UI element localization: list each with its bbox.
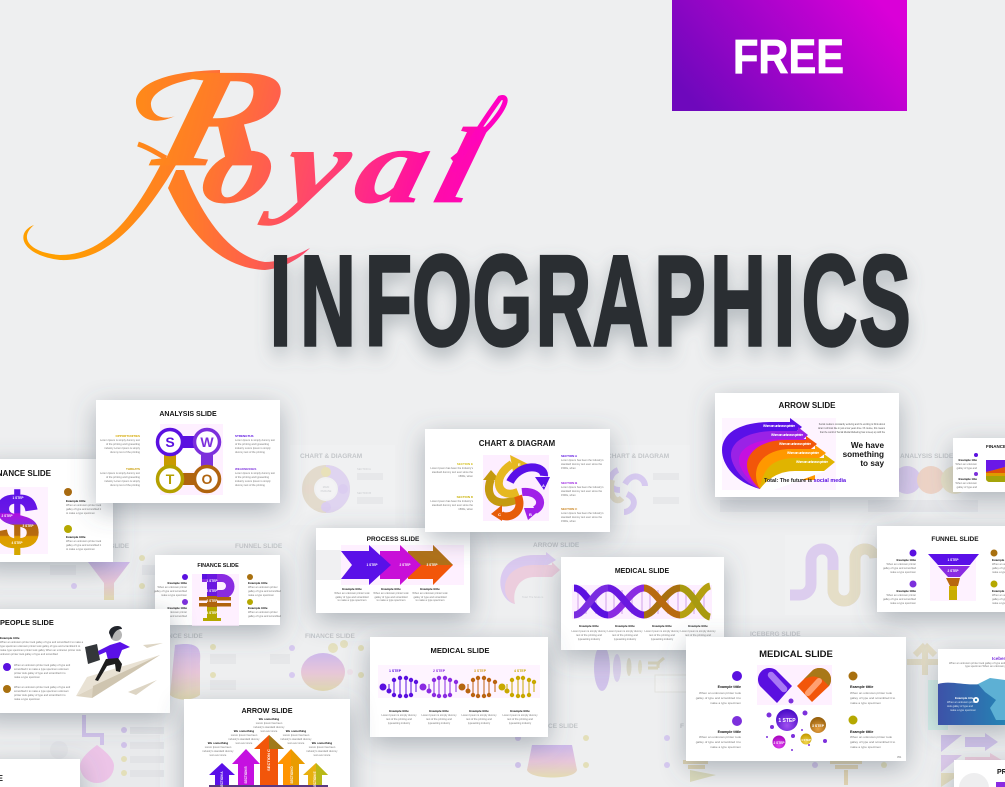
panel: people slide: Example tittle	[0, 636, 20, 640]
panel: finance slide ruble: galley of type and scrambled	[154, 614, 188, 618]
heading: MEDICAL SLIDE	[431, 646, 489, 655]
ghost slides: faded background slides: ANALYSIS SLIDE	[900, 453, 954, 460]
panel: people slide: When an unknown printer took galley of type and	[14, 685, 71, 689]
ghost slides: faded background slides: ICEBERG SLIDE	[750, 631, 801, 638]
panel: medical slide dna: text of the printing and	[612, 633, 638, 637]
house arrows chart: SECTION D	[290, 766, 294, 784]
icon: ruble sign: 3 STEP	[207, 599, 218, 603]
ghost slides: faded background slides: F	[680, 723, 684, 730]
panel: medical slide dots: Example tittle	[510, 709, 530, 713]
panel: people slide: scrambled it to make a type specimen unknown	[14, 667, 69, 671]
panel: medical slide dna: Lorem Ipsum is simply dummy	[644, 629, 680, 633]
panel: analysis slide: Lorem Ipsum is simply dummy text	[100, 438, 140, 442]
panel: medical slide dna: text of the printing and	[649, 633, 675, 637]
iceberg and sea	[938, 682, 1005, 725]
icon: dollar sign: 4 STEP	[12, 541, 23, 545]
panel: medical slide dna: Example tittle	[579, 624, 599, 628]
arrows: 3 STEP	[427, 563, 438, 567]
panel: medical slide dots: Lorem Ipsum is simply dummy	[502, 713, 538, 717]
panel: medical slide pills: Example tittle	[718, 730, 741, 734]
panel: arrow slide bottom: We something	[208, 741, 228, 745]
panel: finance slide dollar: galley of type and scrambled it	[66, 507, 101, 511]
panel: medical slide pills: When an unknown printer took	[699, 735, 741, 739]
bubbles: 2 STEP	[774, 741, 785, 745]
panel: finance slide far right: When an unknown	[956, 462, 978, 466]
panel: process slide: to make a type specimen	[377, 598, 406, 602]
panel: chart and diagram slide: SECTION A	[561, 454, 578, 458]
panel: medical slide dots: 2 STEP	[433, 669, 446, 673]
heading: PROCESS SLIDE	[367, 536, 420, 543]
panel: slide bottom left	[0, 759, 80, 787]
panel: finance slide ruble	[154, 555, 282, 626]
panel: funnel slide	[877, 526, 1005, 612]
panel: finance slide ruble: When an unknown printer	[157, 610, 187, 614]
panel: analysis slide: WEAKNESSES	[235, 467, 256, 471]
text block: Social media is constantly evolving and it's exciting to think about	[819, 423, 885, 426]
banner: FREE: FREE	[733, 31, 844, 84]
panel: process slide bottom right	[954, 760, 1005, 787]
ghost slides: faded background slides: SECTION A	[357, 467, 371, 471]
panel: analysis slide: THREATS	[126, 467, 140, 471]
panel: medical slide dna: Lorem Ipsum is simply dummy	[680, 629, 716, 633]
panel: arrow slide bottom: Lorem Ipsum has been	[283, 733, 310, 737]
panel: arrow slide top	[715, 393, 899, 497]
panel: medical slide dots: Example tittle	[389, 709, 409, 713]
panel: chart and diagram slide: Lorem Ipsum has been the Industry's	[430, 499, 474, 503]
panel: medical slide dots: 3 STEP	[474, 669, 487, 673]
panel: analysis slide: dummy text of the printing	[235, 483, 265, 487]
callout: we have something to say: something	[843, 450, 884, 459]
swot diagram: T	[166, 471, 175, 487]
panel: finance slide dollar: Example tittle	[66, 499, 86, 503]
panel: medical slide dna: typesetting industry	[687, 637, 710, 641]
curved arrows: When an unknown printer	[779, 442, 812, 446]
panel: medical slide dots: typesetting industry	[428, 721, 451, 725]
panel: medical slide dots: typesetting industry	[509, 721, 532, 725]
swot diagram: O	[202, 471, 213, 487]
swirl arrows: E	[518, 462, 521, 467]
title script: Royal: oyal	[191, 107, 504, 226]
panel: arrow slide bottom: text ever since	[236, 741, 253, 745]
panel: medical slide dots: text of the printing and	[507, 717, 533, 721]
text block	[818, 423, 886, 434]
swot diagram: S	[165, 434, 175, 450]
panel: arrow slide bottom: We something	[234, 729, 254, 733]
panel: chart and diagram slide: 1500s, when	[561, 519, 576, 523]
icon: ruble sign: 1 STEP	[207, 579, 218, 583]
ghost slides: faded background slides: CHART & DIAGRAM	[607, 453, 669, 460]
arrows: 1 STEP	[367, 563, 378, 567]
panel: arrow slide bottom: We something	[312, 741, 332, 745]
text block: that the world of Social Media Marketing has to keep up with the	[820, 431, 886, 434]
panel: chart and diagram slide	[425, 429, 610, 532]
icon: dollar sign: 2 STEP	[2, 514, 13, 518]
panel: finance slide ruble: Example tittle	[248, 581, 268, 585]
panel: medical slide dots: Lorem Ipsum is simply dummy	[461, 713, 497, 717]
panel: process slide: Example tittle	[420, 587, 440, 591]
arrows	[341, 545, 453, 585]
panel: medical slide dna: Example tittle	[615, 624, 635, 628]
panel: finance slide ruble: When an unknown printer	[248, 610, 278, 614]
panel: chart and diagram slide: standard dummy text ever since the	[432, 470, 474, 474]
ghost slides: faded background slides: CHART & DIAGRAM	[300, 453, 362, 460]
ghost slides: faded background slides: CE SLIDE	[548, 723, 579, 730]
panel: medical slide dots: typesetting industry	[468, 721, 491, 725]
panel: analysis slide: Lorem Ipsum is simply dummy text	[100, 471, 140, 475]
panel: funnel slide: Example tittle	[896, 558, 916, 562]
panel: analysis slide: dummy text of the printing	[110, 450, 141, 454]
panel: chart and diagram slide: standard dummy text ever since the	[432, 503, 474, 507]
arrows: 2 STEP	[400, 563, 411, 567]
panel: finance slide ruble: make a type specimen	[161, 593, 188, 597]
text block: what it will look like in just a few years time. Of course, this means	[818, 427, 886, 430]
panel: analysis slide: industry Lorem Ipsum is simply	[104, 446, 141, 450]
panel: people slide	[0, 609, 170, 713]
heading: FUNNEL SLIDE	[931, 536, 979, 543]
panel: arrow slide bottom: industry's standard dummy	[229, 737, 260, 741]
panel: medical slide pills: Example tittle	[718, 685, 741, 689]
title script: Royal	[23, 41, 521, 270]
panel: medical slide pills: 351	[897, 755, 902, 759]
icon: ruble sign: 2 STEP	[207, 589, 218, 593]
icon: wallet	[986, 460, 1005, 482]
panel: medical slide dots: text of the printing and	[466, 717, 492, 721]
heading: MEDICAL SLIDE	[615, 568, 669, 575]
panel: medical slide pills: make a type specimen	[710, 701, 741, 705]
ghost slides: faded background slides	[40, 445, 1005, 787]
ghost slides: faded background slides: NCE SLIDE	[168, 633, 203, 640]
panel: analysis slide: OPPORTUNITIES	[115, 434, 140, 438]
panel: medical slide pills: Example tittle	[850, 730, 873, 734]
house arrows chart	[209, 735, 328, 787]
panel: analysis slide: of the printing and typesetting	[235, 442, 270, 446]
panel: medical slide dots	[370, 637, 548, 737]
panel: medical slide pills: galley of type and scrambled it to	[696, 740, 741, 744]
swot diagram	[158, 430, 220, 492]
panel: medical slide dna: Example tittle	[688, 624, 708, 628]
panel: funnel slide: When an unknown printer	[886, 562, 916, 566]
bubbles: 1 STEP	[778, 718, 796, 724]
bubbles: 4 STEP	[801, 738, 811, 742]
panel: medical slide pills	[686, 637, 906, 761]
panel: process slide	[316, 528, 470, 613]
panel: medical slide dots: Lorem Ipsum is simply dummy	[381, 713, 417, 717]
panel: people slide: When an unknown printer took galley of type and	[14, 663, 71, 667]
panel: medical slide dna: Lorem Ipsum is simply dummy	[571, 629, 607, 633]
banner: FREE	[672, 0, 907, 111]
panel: medical slide dna: Example tittle	[652, 624, 672, 628]
panel: iceberg slide	[928, 649, 1005, 730]
ghost slides: faded background slides: MAIN	[323, 485, 329, 489]
panel: finance slide ruble: When an unknown printer	[157, 585, 187, 589]
panel: medical slide dots: Lorem Ipsum is simply dummy	[421, 713, 457, 717]
ghost slides: faded background slides: FINANCE SLIDE	[305, 633, 356, 640]
total line: Total: The future is social media	[764, 478, 847, 484]
dna beads chain	[380, 676, 536, 698]
panel: finance slide ruble: make a type specimen	[248, 593, 275, 597]
panel: finance slide far right: galley of type and	[957, 485, 978, 489]
panel: finance slide ruble: galley of type and scrambled	[154, 589, 188, 593]
callout: we have something to say: to say	[860, 459, 884, 468]
panel: funnel slide: When an unknown printer	[886, 593, 916, 597]
dna helix	[574, 586, 710, 617]
panel: medical slide pills: galley of type and scrambled it to	[850, 696, 896, 700]
curved arrows: When an unknown printer	[796, 460, 829, 464]
ghost slides: faded background slides: SLIDE	[110, 543, 130, 550]
panel: finance slide far right: Example title	[958, 477, 977, 481]
panel: arrow slide bottom: Lorem Ipsum has been	[309, 745, 336, 749]
illustration: businessman on paper plane	[76, 626, 163, 698]
bubbles: 3 STEP	[812, 724, 825, 728]
panel: medical slide dots: text of the printing and	[386, 717, 412, 721]
panel: finance slide far right: Example title	[958, 458, 977, 462]
panel: arrow slide bottom: text ever since	[210, 753, 227, 757]
panel: funnel slide: Example tittle	[896, 589, 916, 593]
panel: medical slide dna: text of the printing and	[685, 633, 711, 637]
panel: arrow slide bottom: text ever since	[261, 729, 278, 733]
panel: people slide: printer took galley of type and scrambled it to	[14, 693, 66, 697]
panel: medical slide dna	[561, 557, 724, 650]
panel: chart and diagram slide: standard dummy text ever since the	[561, 462, 603, 466]
panel: medical slide pills: galley of type and scrambled it to	[696, 696, 741, 700]
ghost slides: faded background slides: SECTION B	[357, 491, 371, 495]
panel: people slide: printer took galley of type and scrambled it to	[14, 671, 66, 675]
panel: medical slide dna: typesetting industry	[614, 637, 637, 641]
panel: arrow slide bottom: Lorem Ipsum has been	[231, 733, 258, 737]
panel: chart and diagram slide: Lorem Ipsum has been the Industry's	[430, 466, 474, 470]
curved arrows: When an unknown printer	[771, 433, 804, 437]
panel: finance slide ruble: Example tittle	[167, 606, 187, 610]
panel: analysis slide: of the printing and typesetting	[235, 475, 270, 479]
panel: chart and diagram slide: Lorem Ipsum has been the Industry's	[561, 458, 604, 462]
panel: arrow slide bottom: text ever since	[288, 741, 305, 745]
panel: analysis slide: Lorem Ipsum is simply dummy text	[235, 471, 275, 475]
panel: chart and diagram slide: SECTION B	[561, 481, 578, 485]
panel: finance slide dollar: to make a type specimen	[66, 511, 95, 515]
panel: people slide: make a type specimen	[14, 697, 41, 701]
panel: chart and diagram slide: standard dummy text ever since the	[561, 515, 603, 519]
panel: process slide: When an unknown printer took	[373, 591, 409, 595]
panel: finance slide dollar: When an unknown printer took	[66, 539, 102, 543]
curved arrows: When an unknown printer	[787, 451, 820, 455]
panel: medical slide dots: Example tittle	[469, 709, 489, 713]
panel: arrow slide bottom: We something	[286, 729, 306, 733]
panel: iceberg slide: took galley of type and	[947, 704, 974, 708]
funnel chart: 1 STEP	[948, 558, 959, 562]
panel: finance slide dollar: to make a type specimen	[66, 547, 95, 551]
panel: analysis slide: of the printing and typesetting	[106, 475, 141, 479]
panel: medical slide pills: galley of type and scrambled it to	[850, 740, 896, 744]
heading: FINANCE SLIDE	[197, 563, 239, 569]
panel: funnel slide: make a type specimen	[890, 601, 917, 605]
panel: finance slide far right: galley of type and	[957, 466, 978, 470]
panel: people slide: scrambled it to make a type specimen unknown	[14, 689, 69, 693]
panel: medical slide pills: make a type specimen	[850, 745, 881, 749]
panel: process slide: Example tittle	[342, 587, 362, 591]
funnel chart: 2 STEP	[948, 569, 959, 573]
heading: CHART & DIAGRAM	[479, 439, 556, 448]
panel: medical slide pills: make a type specimen	[850, 701, 881, 705]
panel: analysis slide	[96, 400, 280, 503]
swirl arrows	[483, 455, 550, 521]
panel: finance slide dollar: Example tittle	[66, 535, 86, 539]
swot diagram: W	[200, 434, 214, 450]
panel: iceberg slide: make a type specimen	[950, 708, 977, 712]
panel: medical slide pills: When an unknown printer took	[699, 691, 741, 695]
panel: process slide: When an unknown printer took	[412, 591, 448, 595]
swirl arrows: C	[498, 512, 501, 517]
panel: medical slide pills: When an unknown printer took	[850, 735, 892, 739]
ghost slides: faded background slides: Total: The future is	[522, 595, 544, 599]
funnel chart	[928, 554, 979, 600]
panel: people slide: make a type specimen	[14, 675, 41, 679]
panel: finance slide ruble: galley of type and scrambled	[248, 614, 282, 618]
panel: finance slide dollar: When an unknown printer took	[66, 503, 102, 507]
panel: finance slide ruble: Example tittle	[167, 581, 187, 585]
panel: chart and diagram slide: standard dummy text ever since the	[561, 489, 603, 493]
callout: we have something to say: We have	[851, 441, 884, 450]
panel: analysis slide: STRENGTHS	[235, 434, 254, 438]
title script: Royal: R	[141, 41, 302, 196]
panel: people slide: unknown printer took galley of type and scrambled	[0, 652, 58, 656]
panel: analysis slide: industry Lorem Ipsum is simply	[235, 446, 271, 450]
panel: process slide: to make a type specimen	[338, 598, 367, 602]
panel: medical slide pills: make a type specimen	[710, 745, 741, 749]
icon: ruble sign	[199, 574, 234, 621]
panel: chart and diagram slide: Lorem Ipsum has been the Industry's	[561, 511, 604, 515]
panel: chart and diagram slide: SECTION C	[561, 507, 578, 511]
heading: ARROW SLIDE	[241, 706, 293, 715]
icon: capsules	[758, 668, 831, 703]
panel: medical slide dna: typesetting industry	[578, 637, 601, 641]
callout: Example title	[955, 696, 974, 700]
panel: chart and diagram slide: SECTION D	[457, 495, 474, 499]
panel: medical slide dna: text of the printing and	[576, 633, 602, 637]
bubbles	[766, 698, 827, 751]
panel: arrow slide bottom: Lorem Ipsum has been	[256, 721, 283, 725]
panel: process slide: Example tittle	[381, 587, 401, 591]
swirl arrows: A	[542, 483, 545, 488]
panel: process slide: galley of type and scrambled	[374, 595, 408, 599]
panel: iceberg slide: When an unknown printer	[947, 700, 977, 704]
panel: people slide: type specimen unknown printer took galley of type and scrambled it to	[0, 644, 81, 648]
panel: funnel slide: galley of type and scrambled	[883, 597, 917, 601]
panel: chart and diagram slide: Lorem Ipsum has been the Industry's	[561, 485, 604, 489]
panel: arrow slide bottom: industry's standard dummy	[203, 749, 234, 753]
panel: process slide: When an unknown printer took	[334, 591, 370, 595]
panel: finance slide far right: When an unknown	[956, 481, 978, 485]
panel: arrow slide bottom: Lorem Ipsum has been	[205, 745, 232, 749]
panel: medical slide dots: Example tittle	[429, 709, 449, 713]
panel: medical slide dna: typesetting industry	[651, 637, 674, 641]
panel: analysis slide: industry Lorem Ipsum is simply	[104, 479, 141, 483]
panel: analysis slide: dummy text of the printing	[110, 483, 141, 487]
heading: PEOPLE SLIDE	[0, 618, 54, 627]
panel: analysis slide: of the printing and typesetting	[106, 442, 141, 446]
panel: process slide: to make a type specimen	[416, 598, 445, 602]
heading: ANALYSIS SLIDE	[159, 411, 217, 418]
panel: analysis slide: industry Lorem Ipsum is simply	[235, 479, 271, 483]
panel: analysis slide: dummy text of the printing	[235, 450, 265, 454]
panel: arrow slide bottom: industry's standard dummy	[254, 725, 285, 729]
panel: arrow slide bottom	[184, 699, 350, 787]
swirl arrows: B	[529, 512, 532, 517]
panel: arrow slide bottom: industry's standard dummy	[307, 749, 338, 753]
panel: finance slide ruble: galley of type and scrambled	[248, 589, 282, 593]
icon: dollar sign: 1 STEP	[13, 496, 24, 500]
icon: ruble sign: 4 STEP	[207, 611, 218, 615]
title: INFOGRAPHICS: INFOGRAPHICS	[270, 230, 911, 373]
ghost slides: faded background slides: FUNNEL SLIDE	[235, 543, 283, 550]
panel: chart and diagram slide: 1500s, when	[561, 493, 576, 497]
panel: people slide: When an unknown printer took galley of type and scrambled it to make a	[0, 640, 84, 644]
panel: chart and diagram slide: 1500s, when	[561, 466, 576, 470]
house arrows chart: SECTION C	[266, 749, 271, 771]
panel: people slide: make type specimen printer took galley When an unknown printer took	[0, 648, 82, 652]
panel: arrow slide bottom: industry's standard dummy	[281, 737, 312, 741]
panel: medical slide dna: Lorem Ipsum is simply dummy	[607, 629, 643, 633]
icon: dollar sign: 3 STEP	[23, 524, 34, 528]
house arrows chart: SECTION B	[244, 766, 248, 784]
ghost slides: faded background slides: PHRASE	[321, 489, 332, 493]
panel: arrow slide bottom: text ever since	[314, 753, 331, 757]
curved arrows: When an unknown printer	[763, 424, 796, 428]
panel: medical slide dots: typesetting industry	[388, 721, 411, 725]
panel: analysis slide: Lorem Ipsum is simply dummy text	[235, 438, 275, 442]
panel: medical slide dots: text of the printing and	[426, 717, 452, 721]
panel: finance slide ruble: Example tittle	[248, 606, 268, 610]
panel: funnel slide: make a type specimen	[890, 570, 917, 574]
panel: finance slide dollar	[0, 459, 113, 565]
panel: chart and diagram slide: SECTION E	[457, 462, 473, 466]
panel: process slide: galley of type and scrambled	[413, 595, 447, 599]
panel: funnel slide: galley of type and scrambled	[883, 566, 917, 570]
heading: ARROW SLIDE	[779, 401, 836, 410]
panel: medical slide pills: Example tittle	[850, 685, 873, 689]
panel: medical slide dots: 1 STEP	[389, 669, 402, 673]
panel: finance slide far right	[953, 438, 1005, 492]
panel: finance slide ruble: When an unknown printer	[248, 585, 278, 589]
panel: medical slide pills: When an unknown printer took	[850, 691, 892, 695]
curved arrows	[722, 418, 835, 495]
panel: medical slide dots: 4 STEP	[514, 669, 527, 673]
panel: finance slide dollar: galley of type and scrambled it	[66, 543, 101, 547]
panel: arrow slide bottom: We something	[259, 717, 279, 721]
panel: process slide: galley of type and scrambled	[335, 595, 369, 599]
ghost slides: faded background slides: ARROW SLIDE	[533, 542, 580, 549]
panel: chart and diagram slide: 1500s, when	[458, 474, 474, 478]
panel: chart and diagram slide: 1500s, when	[458, 507, 474, 511]
heading: MEDICAL SLIDE	[759, 649, 833, 660]
